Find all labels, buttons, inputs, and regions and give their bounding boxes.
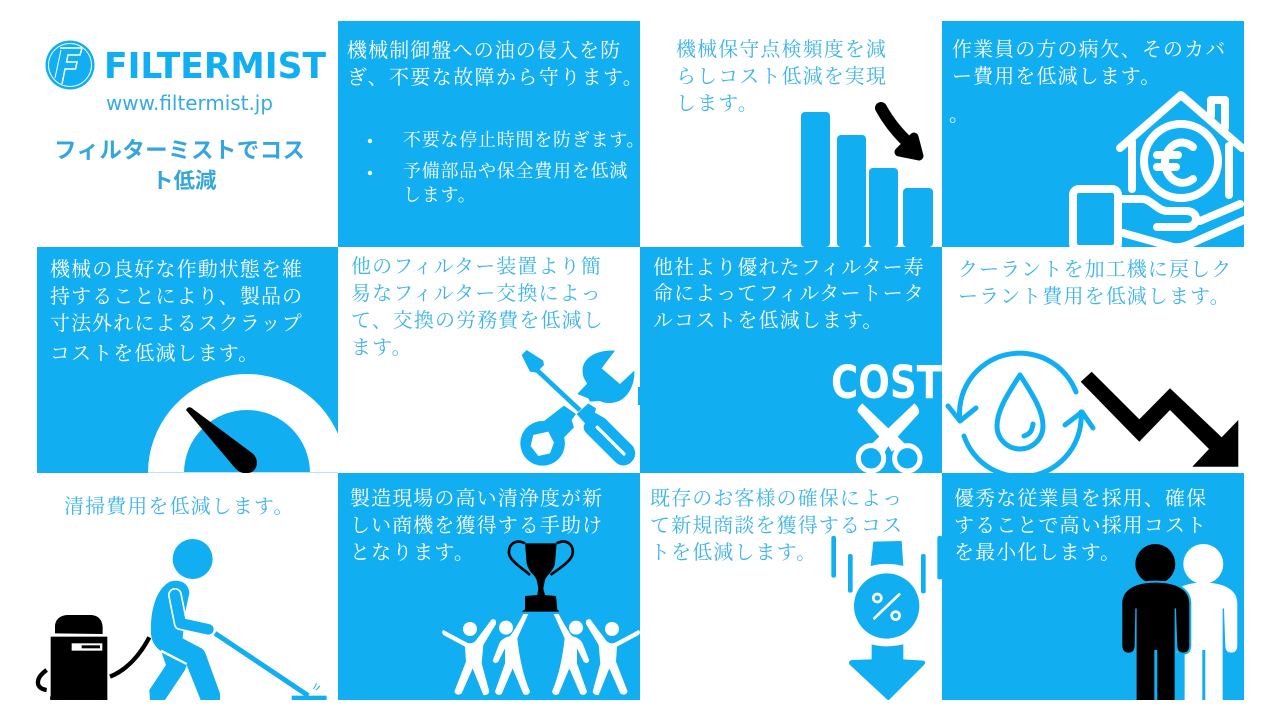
icon: white person	[1170, 544, 1237, 710]
text: replacement description: て、交換の労務費を低減し	[351, 309, 604, 332]
panel: recruitment cost	[942, 473, 1244, 710]
panel: scrap cost	[37, 247, 338, 473]
text: cleaning description: 清掃費用を低減します。	[64, 495, 294, 518]
bullet list: 予備部品や保全費用を低減	[403, 161, 628, 181]
text: filter life description: 他社より優れたフィルター寿	[653, 256, 925, 279]
text: scrap description: 寸法外れによるスクラップ	[50, 312, 303, 335]
bullet list	[368, 130, 645, 205]
heading: ト低減	[152, 169, 217, 193]
panel: coolant cost	[942, 247, 1244, 477]
text: maintenance description: します。	[676, 93, 759, 115]
panel: maintenance cost	[640, 21, 942, 247]
icon: declining bar chart	[801, 112, 933, 247]
icon: person with vacuum cleaner	[38, 539, 327, 707]
text: customer retention description: 既存のお客様の確保によっ	[650, 487, 903, 510]
text: customer retention description	[650, 487, 903, 564]
text: scrap description	[50, 258, 303, 365]
text: recruitment description: 優秀な従業員を採用、確保	[954, 487, 1207, 510]
icon: four cheering people	[442, 614, 640, 695]
bullet list: します。	[403, 185, 477, 205]
panel: control panel protection	[338, 21, 645, 247]
text: filter life description: ルコストを低減します。	[653, 309, 884, 332]
website address: www.filtermist.jp	[106, 91, 273, 115]
text: recruitment description: することで高い採用コスト	[954, 514, 1207, 537]
panel: logo and title	[37, 21, 338, 247]
panel: new business	[338, 473, 640, 700]
text: sick leave description: 作業員の方の病欠、そのカバ	[952, 38, 1226, 61]
icon: black zigzag down arrow	[1081, 372, 1238, 467]
text: new business description: しい商機を獲得する手助け	[350, 514, 603, 537]
icon: cost label with scissors: COST	[831, 356, 942, 409]
text: sick leave description: ー費用を低減します。	[952, 65, 1161, 88]
text: sick leave description: 。	[949, 104, 970, 126]
text: replacement description: ます。	[351, 337, 413, 359]
heading: フィルターミストでコス	[54, 138, 305, 163]
panel: filter replacement labour	[338, 247, 640, 473]
panel: sick leave cost	[942, 21, 1244, 249]
text: filter life description: 命によってフィルタートータ	[653, 282, 925, 305]
text: coolant description: ーラント費用を低減します。	[958, 285, 1231, 308]
text: new business description: 製造現場の高い清浄度が新	[350, 486, 603, 510]
text: filter life description	[653, 256, 925, 332]
text: scrap description: 持することにより、製品の	[50, 285, 303, 308]
text: recruitment description	[954, 487, 1207, 564]
logo wordmark: FILTERMIST	[104, 46, 326, 87]
text: control panel description: ぎ、不要な故障から守ります。	[347, 66, 644, 89]
text: control panel description	[347, 39, 644, 89]
text: sick leave description	[949, 38, 1226, 126]
text: maintenance description	[676, 37, 887, 115]
icon: hand holding house with euro	[1073, 95, 1244, 249]
text: control panel description: 機械制御盤への油の侵入を防	[347, 39, 621, 62]
text: customer retention description: トを低減します。	[650, 541, 817, 564]
text: replacement description: 易なフィルター交換によっ	[351, 282, 602, 305]
text: new business description: となります。	[350, 542, 475, 564]
icon: gauge with needle	[148, 374, 338, 473]
text: customer retention description: て新規商談を獲得するコス	[650, 514, 903, 537]
heading	[54, 138, 305, 193]
text: coolant description: クーラントを加工機に戻しク	[958, 258, 1232, 281]
icon: black down arrow	[881, 108, 919, 156]
text: new business description	[350, 486, 603, 564]
icon: percent down arrow	[831, 536, 943, 701]
text: replacement description: 他のフィルター装置より簡	[351, 255, 602, 278]
text: scrap description: コストを低減します。	[50, 342, 259, 365]
text: replacement description	[351, 255, 604, 359]
text: maintenance description: らしコスト低減を実現	[676, 65, 887, 88]
text: recruitment description: を最小化します。	[954, 541, 1121, 564]
icon: filtermist logo mark	[46, 40, 94, 90]
text: coolant description	[958, 258, 1232, 308]
text: scrap description: 機械の良好な作動状態を維	[50, 258, 303, 281]
page margin mask	[0, 700, 1280, 720]
icon: water cycle	[948, 353, 1093, 477]
bullet list: 不要な停止時間を防ぎます。	[403, 130, 645, 150]
panel: customer retention	[640, 473, 943, 701]
icon: cost label with scissors	[831, 356, 942, 471]
icon: trophy	[509, 542, 573, 612]
panel: filter life cost	[640, 247, 942, 473]
text: maintenance description: 機械保守点検頻度を減	[676, 37, 887, 61]
icon: screwdriver and wrench	[520, 350, 635, 466]
icon: black person	[1122, 544, 1189, 710]
panel: cleaning cost	[37, 473, 338, 707]
icon: two people	[1122, 544, 1237, 710]
icon: team raising trophy	[442, 542, 640, 695]
